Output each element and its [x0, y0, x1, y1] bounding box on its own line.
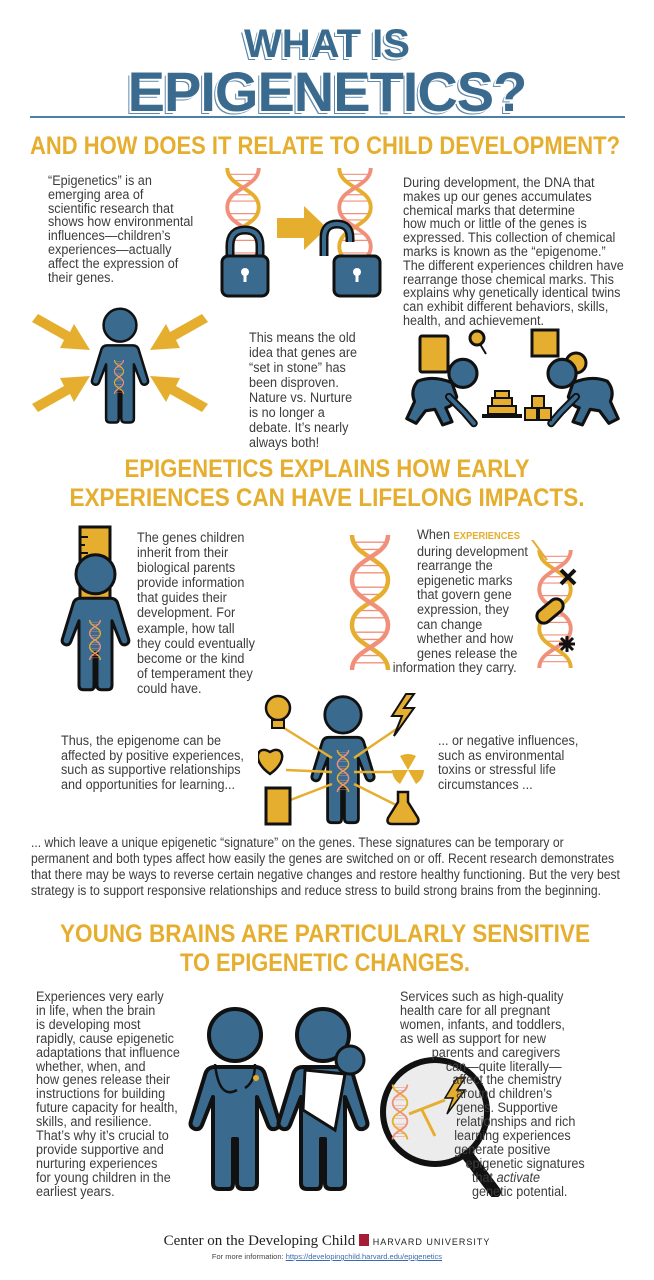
text: services: genetic potential.: [472, 1184, 567, 1199]
icon: dna with marks: [531, 540, 576, 668]
text: set in stone: Nature vs. Nurture: [249, 390, 352, 405]
footer: For more information: https://developingchild.harvard.edu/epigenetics: [212, 1252, 442, 1261]
icon: dna plain: [350, 535, 390, 670]
text: genes inherited: example, how tall: [137, 621, 235, 636]
text: set in stone: been disproven.: [249, 375, 339, 390]
text: services: [400, 989, 585, 1199]
text: during development: marks is known as the “epigenome.”: [403, 244, 606, 259]
text: set in stone: [249, 330, 357, 450]
heading: young brains: TO EPIGENETIC CHANGES.: [180, 949, 470, 977]
heading: young brains: YOUNG BRAINS ARE PARTICULARLY SENSITIVE: [60, 920, 590, 948]
text: signature paragraph: [31, 835, 620, 898]
text: experiences very early: future capacity for health,: [36, 1100, 178, 1115]
icon: child with arrows: [32, 308, 208, 424]
text: genes inherited: [137, 530, 255, 696]
text: genes inherited: provide information: [137, 575, 244, 590]
text: services: epigenetic signatures: [465, 1156, 585, 1171]
text: epigenetics definition: scientific research that: [48, 201, 174, 216]
text: negative influences: [438, 733, 578, 792]
text: positive experiences: affected by positive experiences,: [61, 748, 244, 763]
text: genes inherited: development. For: [137, 605, 235, 620]
text: when experiences: [393, 527, 528, 675]
text: during development: [403, 175, 624, 328]
text: experiences very early: whether, when, and: [36, 1059, 145, 1074]
text: when experiences: expression, they: [417, 602, 509, 617]
text: epigenetics definition: [48, 173, 193, 285]
text: experiences very early: provide supportive and: [36, 1142, 164, 1157]
footer: Center on the Developing Child HARVARD UNIVERSITY: [164, 1233, 490, 1249]
text: when experiences: When EXPERIENCES: [417, 527, 520, 542]
text: negative influences: circumstances ...: [438, 777, 533, 792]
heading: early experiences: EPIGENETICS EXPLAINS HOW EARLY: [124, 455, 530, 483]
text: epigenetics definition: shows how environmental: [48, 214, 193, 229]
text: experiences very early: Experiences very early: [36, 989, 164, 1004]
text: when experiences: genes release the: [417, 646, 517, 661]
text: experiences very early: adaptations that influence: [36, 1045, 180, 1060]
footer: [164, 1233, 490, 1261]
text: services: health care for all pregnant: [400, 1003, 550, 1018]
text: experiences very early: skills, and resilience.: [36, 1114, 152, 1129]
text: during development: makes up our genes accumulates: [403, 189, 592, 204]
heading: young brains: [60, 920, 590, 977]
text: services: around children’s: [456, 1086, 552, 1101]
text: experiences very early: in life, when the brain: [36, 1003, 155, 1018]
text: experiences very early: instructions for building: [36, 1086, 165, 1101]
text: positive experiences: and opportunities for learning...: [61, 777, 235, 792]
text: set in stone: is no longer a: [249, 405, 325, 420]
text: services: that activate: [472, 1170, 540, 1185]
text: signature paragraph: permanent and both types affect how easily the genes are switched on or off. Recent research demonstrates: [31, 851, 614, 866]
icon: dna locked to unlocked: [220, 168, 382, 298]
text: during development: can exhibit different behaviors, skills,: [403, 299, 608, 314]
text: services: generate positive: [454, 1142, 550, 1157]
text: services: as well as support for new: [400, 1031, 546, 1046]
text: epigenetics definition: affect the expression of: [48, 256, 178, 271]
text: when experiences: rearrange the: [417, 558, 493, 573]
text: services: affect the chemistry: [452, 1072, 562, 1087]
text: services: Services such as high-quality: [400, 989, 563, 1004]
text: when experiences: can change: [417, 617, 482, 632]
icon: magnifying glass: [380, 1057, 501, 1197]
heading: early experiences: EXPERIENCES CAN HAVE LIFELONG IMPACTS.: [70, 484, 584, 512]
text: experiences very early: earliest years.: [36, 1184, 115, 1199]
text: signature paragraph: strategy is to support responsive relationships and reduce stress to build strong brains from the beginning.: [31, 883, 601, 898]
icon: crawling twins with toys: [405, 328, 620, 428]
text: epigenetics definition: influences—children’s: [48, 228, 171, 243]
text: epigenetics definition: “Epigenetics” is an: [48, 173, 152, 188]
text: epigenetics definition: experiences—actually: [48, 242, 171, 257]
text: epigenetics definition: their genes.: [48, 270, 114, 285]
text: experiences very early: how genes release their: [36, 1072, 170, 1087]
text: genes inherited: they could eventually: [137, 636, 255, 651]
text: when experiences: epigenetic marks: [417, 573, 512, 588]
text: signature paragraph: ... which leave a unique epigenetic “signature” on the genes. These signatures can be temporary or: [31, 835, 564, 850]
text: set in stone: idea that genes are: [249, 345, 357, 360]
text: services: women, infants, and toddlers,: [400, 1017, 565, 1032]
text: genes inherited: could have.: [137, 681, 202, 696]
text: services: genes. Supportive: [456, 1100, 558, 1115]
text: negative influences: such as environmental: [438, 748, 564, 763]
text: during development: explains why genetically identical twins: [403, 285, 621, 300]
text: services: learning experiences: [454, 1128, 571, 1143]
text: when experiences: whether and how: [417, 631, 513, 646]
text: during development: During development, the DNA that: [403, 175, 595, 190]
icon: child with ruler: [60, 526, 130, 692]
text: services: relationships and rich: [456, 1114, 575, 1129]
text: during development: chemical marks that determine: [403, 203, 575, 218]
text: set in stone: This means the old: [249, 330, 356, 345]
text: during development: how much or little of the genes is: [403, 216, 587, 231]
text: experiences very early: rapidly, cause epigenetic: [36, 1031, 174, 1046]
text: during development: health, and achievement.: [403, 313, 544, 328]
heading: early experiences: [70, 455, 584, 512]
text: positive experiences: [61, 733, 244, 792]
text: set in stone: “set in stone” has: [249, 360, 346, 375]
text: during development: The different experiences children have: [403, 258, 624, 273]
text: epigenetics definition: emerging area of: [48, 187, 143, 202]
text: services: can—quite literally—: [446, 1059, 562, 1074]
icon: doctor and parent with baby: [188, 1007, 370, 1191]
text: set in stone: always both!: [249, 435, 319, 450]
text: experiences very early: nurturing experiences: [36, 1156, 157, 1171]
text: genes inherited: inherit from their: [137, 545, 228, 560]
text: experiences very early: for young children in the: [36, 1170, 171, 1185]
text: negative influences: ... or negative influences,: [438, 733, 578, 748]
text: when experiences: during development: [417, 544, 528, 559]
text: experiences very early: is developing most: [36, 1017, 141, 1032]
text: when experiences: that govern gene: [417, 587, 512, 602]
text: genes inherited: become or the kind: [137, 651, 244, 666]
text: signature paragraph: that there may be ways to reverse certain negative changes and restore healthy functioning. But the very best: [31, 867, 620, 882]
text: positive experiences: such as supportive relationships: [61, 762, 241, 777]
icon: child with influences: [258, 693, 424, 826]
text: genes inherited: of temperament they: [137, 666, 253, 681]
title: EPIGENETICS?: [128, 60, 526, 123]
text: when experiences: information they carry.: [393, 660, 517, 675]
text: experiences very early: [36, 989, 180, 1199]
text: experiences very early: That’s why it’s crucial to: [36, 1128, 169, 1143]
text: genes inherited: that guides their: [137, 590, 227, 605]
text: set in stone: debate. It’s nearly: [249, 420, 348, 435]
text: during development: expressed. This collection of chemical: [403, 230, 615, 245]
text: services: parents and caregivers: [432, 1045, 560, 1060]
text: genes inherited: biological parents: [137, 560, 235, 575]
text: during development: rearrange those chemical marks. This: [403, 272, 614, 287]
title: WHAT IS: [244, 22, 410, 66]
text: genes inherited: The genes children: [137, 530, 244, 545]
text: positive experiences: Thus, the epigenome can be: [61, 733, 221, 748]
title: [128, 22, 526, 123]
text: negative influences: toxins or stressful life: [438, 762, 556, 777]
